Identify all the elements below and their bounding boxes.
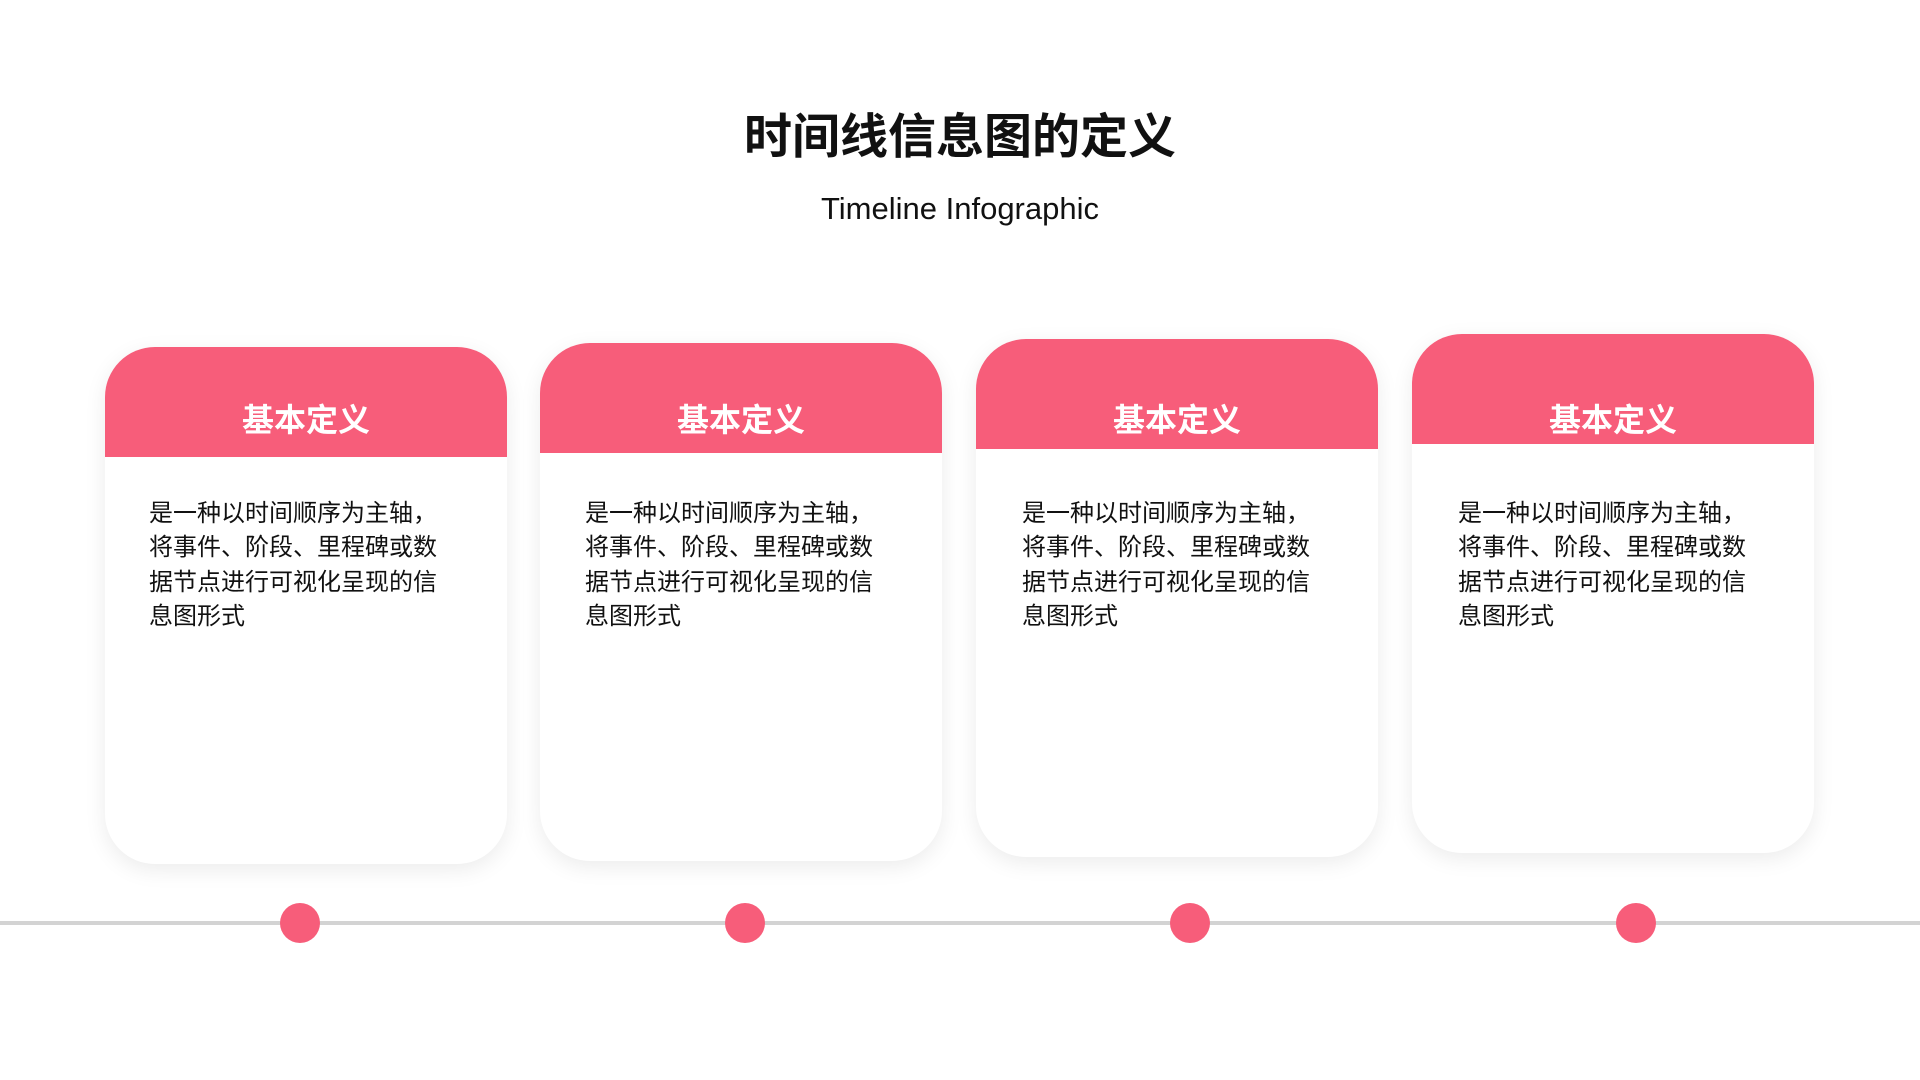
timeline axis <box>0 921 1920 925</box>
card 2 heading: 基本定义 <box>677 402 805 438</box>
card 3 text: 是一种以时间顺序为主轴， <box>1022 500 1310 527</box>
card 1 text: 是一种以时间顺序为主轴， <box>149 500 437 527</box>
card 4 text <box>1458 500 1746 630</box>
subtitle: Timeline Infographic <box>821 191 1099 226</box>
card 2 text: 息图形式 <box>585 603 681 630</box>
card 3 heading: 基本定义 <box>1113 402 1241 438</box>
card 1 text: 息图形式 <box>149 603 245 630</box>
card 3 text: 息图形式 <box>1022 603 1118 630</box>
card 4 heading: 基本定义 <box>1549 402 1677 438</box>
timeline dot 2 <box>725 903 765 943</box>
card 1 text: 将事件、阶段、里程碑或数 <box>149 534 437 561</box>
card 2 text: 据节点进行可视化呈现的信 <box>585 569 873 596</box>
card 4 text: 是一种以时间顺序为主轴， <box>1458 500 1746 527</box>
card 2 text <box>585 500 873 630</box>
card 2 text: 是一种以时间顺序为主轴， <box>585 500 873 527</box>
card 4 text: 据节点进行可视化呈现的信 <box>1458 569 1746 596</box>
card 1 text <box>149 500 437 630</box>
card 1 heading: 基本定义 <box>242 402 370 438</box>
timeline dot 4 <box>1616 903 1656 943</box>
panel: card 4 <box>1412 334 1814 853</box>
card 3 text <box>1022 500 1310 630</box>
card 4 text: 将事件、阶段、里程碑或数 <box>1458 534 1746 561</box>
panel: card 2 <box>540 343 942 861</box>
panel: card 1 <box>105 347 507 864</box>
timeline dot 3 <box>1170 903 1210 943</box>
panel: card 3 <box>976 339 1378 857</box>
card 3 text: 据节点进行可视化呈现的信 <box>1022 569 1310 596</box>
card 2 text: 将事件、阶段、里程碑或数 <box>585 534 873 561</box>
card 1 text: 据节点进行可视化呈现的信 <box>149 569 437 596</box>
card 3 text: 将事件、阶段、里程碑或数 <box>1022 534 1310 561</box>
timeline dot 1 <box>280 903 320 943</box>
title: 时间线信息图的定义 <box>744 111 1176 164</box>
card 4 text: 息图形式 <box>1458 603 1554 630</box>
